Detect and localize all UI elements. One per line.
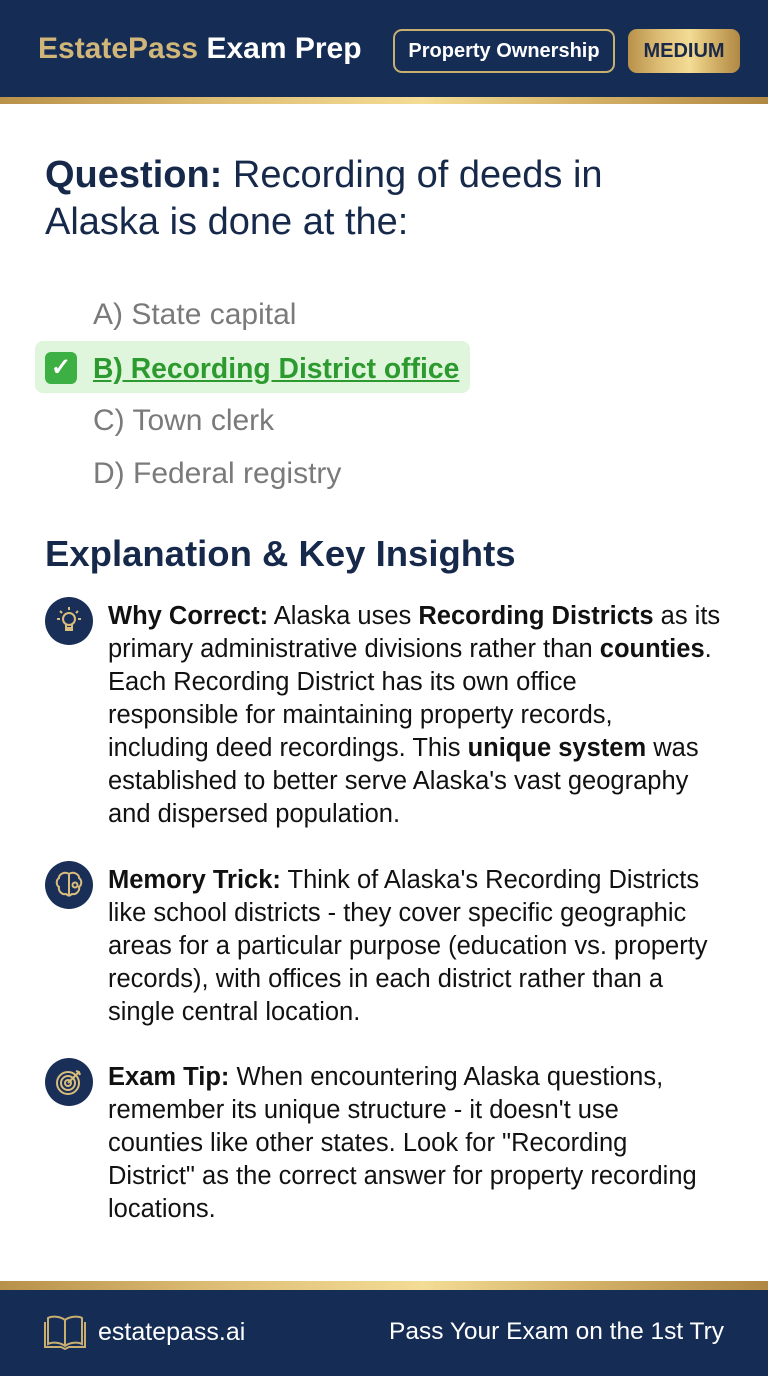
question: Question: Recording of deeds in (45, 154, 603, 196)
insight: memory trick: like school districts - they cover specific geographic (108, 899, 686, 927)
footer (0, 1290, 768, 1376)
option B correct (35, 341, 470, 393)
category badge (393, 29, 615, 73)
option A: A) State capital (93, 298, 296, 331)
question: Alaska is done at the: (45, 201, 408, 243)
insight: exam tip: counties like other states. Look for "Recording (108, 1129, 627, 1157)
explanation heading: Explanation & Key Insights (45, 533, 516, 574)
option D: D) Federal registry (93, 457, 341, 490)
icon: target (45, 1058, 93, 1106)
insight: why correct: established to better serve Alaska's vast geography (108, 767, 688, 795)
insight: memory trick (45, 861, 708, 1026)
insight: memory trick: records), with offices in each district rather than a (108, 965, 663, 993)
insight: exam tip: remember its unique structure - it doesn't use (108, 1096, 619, 1124)
icon: book (44, 1316, 86, 1350)
question (45, 154, 603, 243)
insight: why correct (45, 597, 720, 828)
tagline: Pass Your Exam on the 1st Try (389, 1318, 724, 1345)
insight: why correct: Each Recording District has its own office (108, 668, 577, 696)
insight: why correct: Why Correct: Alaska uses Recording Districts as its (108, 602, 720, 630)
option C: C) Town clerk (93, 404, 274, 437)
options: ✓ (51, 354, 71, 381)
category badge: Property Ownership (408, 40, 600, 62)
insight: memory trick: areas for a particular purpose (education vs. property (108, 932, 708, 960)
footer url: estatepass.ai (98, 1318, 245, 1346)
insight: memory trick: single central location. (108, 998, 360, 1026)
difficulty badge: MEDIUM (643, 40, 725, 62)
options: B) Recording District office (93, 352, 459, 384)
insight: exam tip (45, 1058, 697, 1223)
insight: why correct: including deed recordings. This unique system was (108, 734, 699, 762)
insight: exam tip: locations. (108, 1195, 216, 1223)
brand title: EstatePass Exam Prep (38, 32, 362, 65)
header (0, 0, 768, 97)
options (35, 298, 470, 490)
insight: exam tip: Exam Tip: When encountering Alaska questions, (108, 1063, 663, 1091)
icon: lightbulb (45, 597, 93, 645)
insight: why correct: and dispersed population. (108, 800, 400, 828)
icon: brain (45, 861, 93, 909)
insight: why correct: responsible for maintaining property records, (108, 701, 613, 729)
insight: exam tip: District" as the correct answer for property recording (108, 1162, 697, 1190)
insight: why correct: primary administrative divisions rather than counties. (108, 635, 712, 663)
difficulty badge (628, 29, 740, 73)
insight: memory trick: Memory Trick: Think of Alaska's Recording Districts (108, 866, 699, 894)
